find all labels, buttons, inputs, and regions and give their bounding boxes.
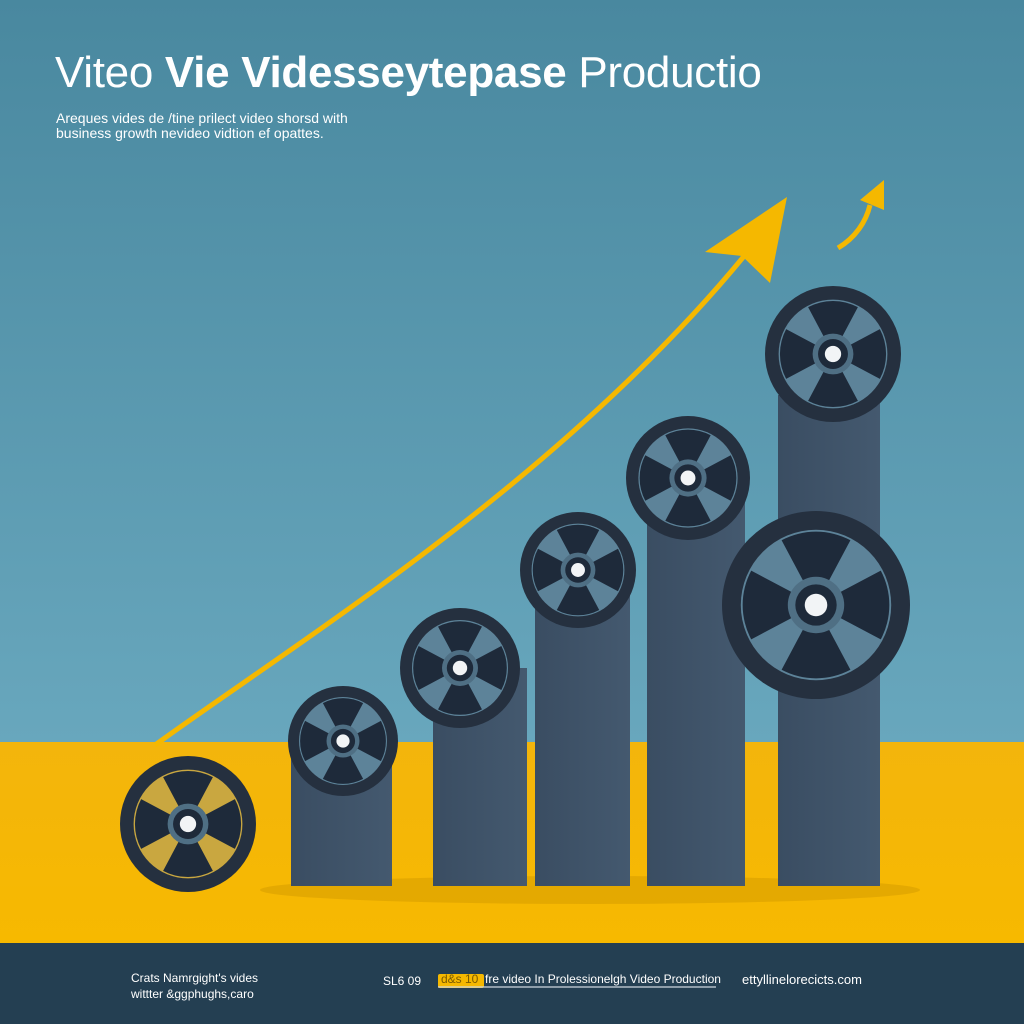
footer code: SL6 09 — [383, 974, 421, 988]
subtitle: business growth nevideo vidtion ef opattes. — [56, 125, 324, 141]
footer left text — [131, 971, 258, 1001]
footer tag — [438, 974, 484, 988]
floor — [0, 742, 1024, 943]
title: Viteo Vie Videsseytepase Productio — [55, 48, 762, 97]
footer left text: Crats Namrgight's vides — [131, 971, 258, 985]
small arrow — [838, 180, 884, 248]
footer bar — [0, 943, 1024, 1024]
subtitle — [56, 110, 348, 141]
bar chart — [260, 395, 920, 904]
growth arrow — [155, 197, 787, 745]
background sky — [0, 0, 1024, 742]
footer url: ettyllinelorecicts.com — [742, 972, 862, 987]
reel icons — [120, 286, 910, 892]
footer left text: wittter &ggphughs,caro — [131, 987, 254, 1001]
footer tagline: d&s 10 fre video In Prolessionelgh Video Production — [441, 972, 721, 986]
subtitle: Areques vides de /tine prilect video shorsd with — [56, 110, 348, 126]
